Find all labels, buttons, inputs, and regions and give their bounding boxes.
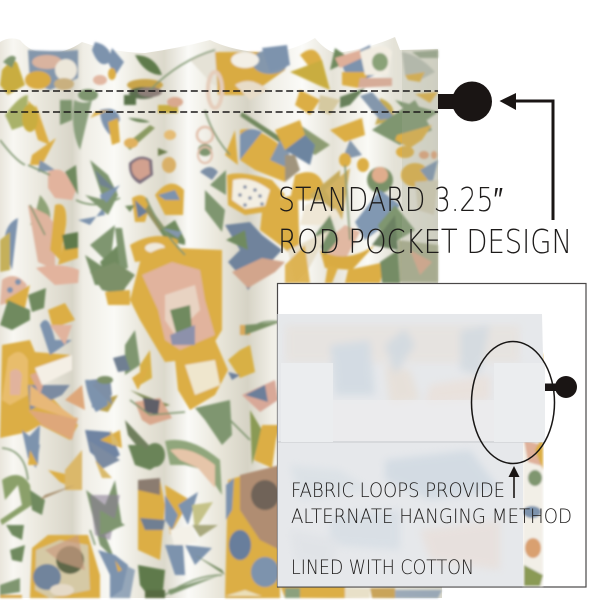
faint show-through print	[285, 325, 520, 570]
arrow to loop	[508, 466, 520, 498]
top band florals	[0, 42, 290, 172]
inset panel: curtain back	[278, 284, 586, 587]
cotton lining	[278, 314, 545, 586]
rod pocket dashed lines	[0, 91, 438, 112]
inset background	[278, 284, 586, 587]
caption: lined with cotton: LINED WITH COTTON	[291, 556, 474, 579]
floral strip at edge	[523, 354, 543, 586]
caption: fabric loops	[291, 479, 572, 528]
curtain panel	[0, 37, 442, 598]
rod pocket band	[333, 400, 494, 441]
left large flower	[0, 300, 112, 468]
loop highlight ellipse	[472, 342, 554, 464]
stems	[0, 50, 350, 595]
right column florals	[275, 45, 438, 283]
fabric loop: left	[281, 363, 333, 442]
lower left florals	[0, 376, 135, 598]
lower centre florals	[128, 440, 225, 598]
heading: rod pocket design: STANDARD 3.25″	[278, 180, 503, 219]
middle florals	[0, 148, 185, 312]
curtain fabric	[0, 37, 442, 598]
large yellow flower	[200, 112, 300, 290]
caption: fabric loops: FABRIC LOOPS PROVIDE	[291, 479, 505, 502]
lower right florals	[225, 425, 442, 598]
central large flower	[90, 248, 280, 467]
right edge shadow	[402, 50, 438, 283]
fabric loop: right	[494, 363, 545, 442]
heading: rod pocket design	[278, 180, 572, 261]
small rod and finial	[545, 376, 577, 398]
arrow pointing to rod	[500, 93, 553, 220]
curtain rod with finial	[438, 82, 492, 122]
caption: fabric loops: ALTERNATE HANGING METHOD	[291, 505, 572, 528]
floral print	[0, 42, 442, 598]
